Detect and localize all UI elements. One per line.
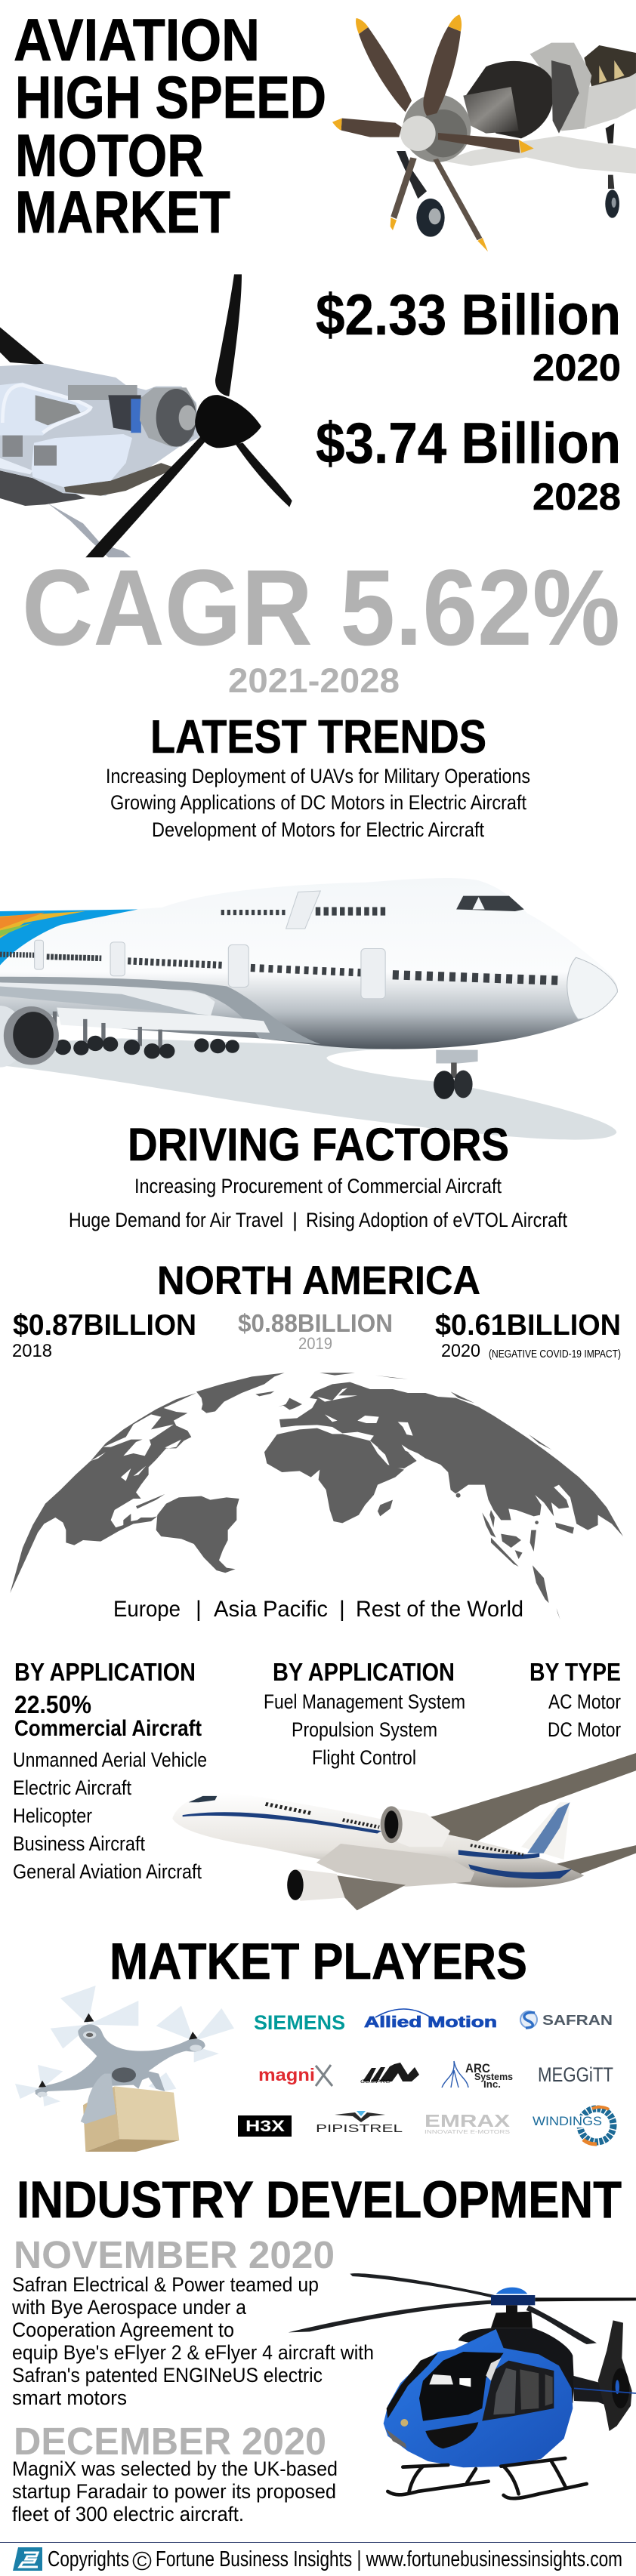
icon: electric motor aircraft with black propeller [0, 274, 292, 557]
text block: system list: Flight Control [312, 1746, 416, 1769]
text block: system list: Fuel Management System [264, 1690, 465, 1713]
logo: H3X [238, 2115, 292, 2137]
stat: 2019 value: 2019 [298, 1334, 332, 1353]
stat: 2019 value: $0.88BILLION [238, 1309, 393, 1337]
stat: 2020 value: $0.61BILLION [435, 1309, 621, 1342]
text block: driving factors list: Rising Adoption of eVTOL Aircraft [306, 1209, 567, 1231]
panel: driving factors [69, 1119, 567, 1231]
text block: type list: AC Motor [548, 1690, 621, 1713]
icon: blue helicopter [289, 2273, 636, 2498]
text block: trends list [106, 765, 530, 841]
text block: december details [12, 2457, 338, 2525]
text block: november details: Safran's patented ENGINeUS electric [12, 2364, 323, 2386]
world map [10, 1373, 623, 1619]
text block: trends list: Increasing Deployment of UAVs for Military Operations [106, 765, 530, 787]
text block: other regions: Rest of the World [356, 1597, 523, 1622]
stat: 2018 value [12, 1309, 196, 1361]
icon: twin-engine airliner [172, 1753, 636, 1910]
panel: by application (centre) [264, 1658, 465, 1769]
icon: delivery drone with parcel [15, 1986, 234, 2152]
panel: latest trends [106, 711, 530, 841]
text: copyright line: Copyrights [48, 2547, 129, 2571]
stat: market size 2028 [316, 411, 621, 518]
text block: other regions: | [339, 1597, 345, 1622]
text block: system list [264, 1690, 465, 1769]
heading: north america: NORTH AMERICA [157, 1259, 480, 1303]
text block: driving factors list: | [292, 1209, 298, 1231]
logo: ARC Systems Inc.: Inc. [483, 2078, 501, 2090]
text block: other regions: | [196, 1597, 202, 1622]
text block: application list: Unmanned Aerial Vehicle [13, 1749, 207, 1771]
logo: Allied Motion: Allied Motion [364, 2014, 497, 2031]
text block: application list [13, 1749, 207, 1883]
stat: market size 2020: 2020 [533, 347, 621, 389]
title [14, 6, 326, 245]
stat: CAGR: 2021-2028 [228, 661, 400, 700]
title: MOTOR [15, 122, 204, 189]
heading: november 2020: NOVEMBER 2020 [14, 2233, 335, 2276]
logo: Pipistrel: PIPISTREL [316, 2122, 403, 2135]
panel: north america [12, 1259, 621, 1361]
text block: november details: equip Bye's eFlyer 2 & eFlyer 4 aircraft with [12, 2341, 374, 2364]
text block: other regions: Asia Pacific [214, 1597, 328, 1622]
logo: Allied Motion [364, 2009, 497, 2031]
logo: Siemens: SIEMENS [254, 2011, 345, 2034]
logo: Compro: COMPRO [360, 2080, 391, 2085]
divider line [0, 2542, 636, 2543]
icon: six-blade propeller aircraft [332, 14, 636, 251]
logo: Windings: WINDINGS [533, 2114, 602, 2128]
logo: Pipistrel [316, 2111, 403, 2135]
stat: 2019 value [238, 1309, 393, 1353]
heading: by application: BY APPLICATION [14, 1658, 196, 1686]
text block: december details: MagniX was selected by the UK-based [12, 2457, 338, 2480]
text block: trends list: Growing Applications of DC Motors in Electric Aircraft [110, 791, 526, 814]
text block: driving factors list [69, 1175, 567, 1231]
stat: market size 2020 [316, 283, 621, 389]
title: MARKET [15, 178, 230, 245]
heading: december 2020: DECEMBER 2020 [14, 2420, 326, 2463]
heading: by application centre: BY APPLICATION [273, 1658, 455, 1686]
text block: other regions: Europe [113, 1597, 181, 1622]
logo: magniX: magni [258, 2065, 315, 2085]
panel: november 2020 development [11, 2233, 374, 2409]
text block: december details: fleet of 300 electric aircraft. [12, 2503, 244, 2525]
text block: type list: DC Motor [548, 1718, 621, 1741]
logo: Windings [533, 2107, 613, 2144]
text block: other regions [113, 1597, 523, 1622]
stat: commercial aircraft share: Commercial Aircraft [14, 1716, 202, 1741]
logo: Meggitt: MEGGiTT [538, 2063, 613, 2086]
logo: H3X: H3X [245, 2118, 285, 2135]
panel: company logos [238, 2009, 613, 2144]
icon: Fortune Business Insights logo [13, 2547, 42, 2571]
stat: 2018 value: $0.87BILLION [13, 1309, 196, 1342]
logo: ARC Systems Inc.: ARC [465, 2061, 490, 2075]
text block: december details: startup Faradair to power its proposed [12, 2480, 336, 2503]
heading: driving factors: DRIVING FACTORS [128, 1119, 509, 1170]
stat: 2018 value: 2018 [12, 1341, 52, 1361]
text: copyright line: C [137, 2554, 147, 2570]
panel: by type [529, 1658, 621, 1741]
text block: november details: Safran Electrical & Power teamed up [12, 2273, 319, 2296]
text block: november details: smart motors [12, 2386, 127, 2409]
logo: Emrax: INNOVATIVE E-MOTORS [425, 2130, 510, 2135]
text block: system list: Propulsion System [292, 1718, 437, 1741]
title: AVIATION [14, 6, 260, 73]
text block: type list [548, 1690, 621, 1741]
text block: application list: Helicopter [13, 1804, 92, 1827]
stat: 2020 value [435, 1309, 621, 1361]
icon: jumbo jet airliner [0, 878, 618, 1140]
logo: Emrax [425, 2111, 511, 2135]
panel: by application (left) [13, 1658, 207, 1883]
logo: magniX [258, 2065, 332, 2086]
logo: Safran: SAFRAN [542, 2013, 613, 2028]
heading: latest trends: LATEST TRENDS [150, 711, 486, 763]
text block: application list: Business Aircraft [13, 1832, 145, 1855]
text block: driving factors list: Huge Demand for Air Travel [69, 1209, 283, 1231]
stat: commercial aircraft share [14, 1690, 202, 1741]
stat: 2020 value: 2020 [441, 1341, 480, 1361]
heading: market players: MATKET PLAYERS [110, 1933, 527, 1990]
stat: market size 2028: 2028 [533, 476, 621, 518]
stat: commercial aircraft share: 22.50% [14, 1690, 91, 1718]
logo: Emrax: EMRAX [425, 2111, 511, 2131]
text block: application list: Electric Aircraft [13, 1776, 131, 1799]
panel: footer [13, 2547, 622, 2571]
logo: ARC Systems Inc. [442, 2061, 513, 2090]
panel: december 2020 development [12, 2420, 338, 2525]
title: HIGH SPEED [15, 63, 326, 131]
text block: november details: Cooperation Agreement to [12, 2319, 234, 2341]
text block: trends list: Development of Motors for Electric Aircraft [152, 818, 484, 841]
heading: by type: BY TYPE [529, 1658, 621, 1686]
logo: Compro [360, 2063, 419, 2085]
text block: driving factors list: Increasing Procurement of Commercial Aircraft [134, 1175, 502, 1197]
logo: Safran [520, 2011, 613, 2028]
text block: november details [11, 2273, 374, 2409]
text block: application list: General Aviation Aircraft [13, 1860, 202, 1883]
logo: ARC Systems Inc.: Systems [474, 2071, 513, 2082]
text block: november details: with Bye Aerospace under a [11, 2296, 247, 2319]
